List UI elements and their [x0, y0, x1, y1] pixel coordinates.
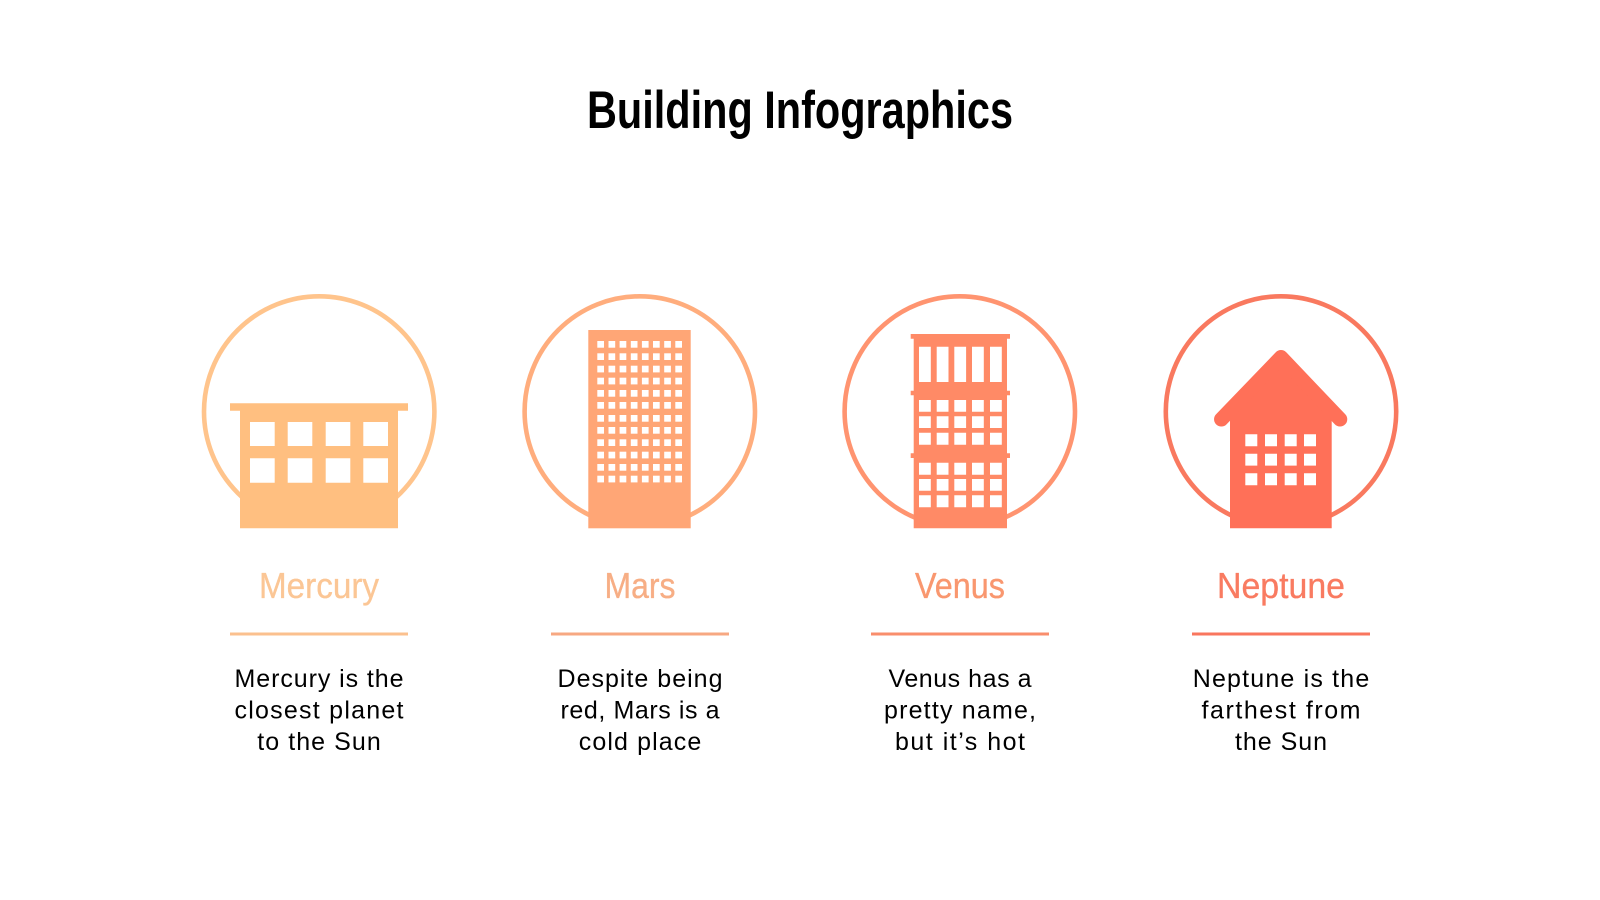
- panel: Neptune: [1166, 296, 1396, 756]
- panel: Mars: [525, 296, 755, 756]
- icon: three-tier building in circle: [845, 296, 1075, 528]
- text block: Neptune: the Sun: [1235, 728, 1327, 756]
- heading: Venus: Venus: [915, 565, 1005, 606]
- text block: Venus: [884, 665, 1036, 756]
- text block: Mercury: [234, 665, 404, 756]
- text block: Mercury: Mercury is the: [234, 665, 404, 693]
- icon: high-rise tower in circle: [525, 296, 755, 528]
- text block: Venus: but it’s hot: [895, 728, 1025, 756]
- text block: Neptune: [1193, 665, 1369, 756]
- text block: Venus: Venus has a: [888, 665, 1032, 693]
- heading: Neptune: Neptune: [1217, 565, 1345, 606]
- panel: Mercury: [204, 296, 434, 756]
- text block: Venus: pretty name,: [884, 696, 1036, 724]
- text block: Neptune: farthest from: [1202, 696, 1360, 724]
- text block: Mars: cold place: [579, 728, 701, 756]
- divider: Venus: [871, 632, 1049, 636]
- icon: low-rise building in circle: [204, 296, 434, 528]
- divider: Neptune: [1192, 632, 1370, 636]
- text block: Mercury: closest planet: [234, 696, 404, 724]
- heading: Mercury: Mercury: [259, 565, 379, 606]
- text block: Mars: [558, 665, 722, 756]
- text block: Mars: Despite being: [558, 665, 722, 693]
- infographic canvas: [202, 90, 1398, 755]
- text block: Neptune: Neptune is the: [1193, 665, 1369, 693]
- title: Building Infographics: [587, 81, 1013, 140]
- divider: Mars: [551, 632, 729, 636]
- divider: Mercury: [230, 632, 408, 636]
- icon: house-shaped building in circle: [1166, 296, 1396, 528]
- panel: Venus: [845, 296, 1075, 756]
- text block: Mercury: to the Sun: [257, 728, 381, 756]
- text block: Mars: red, Mars is a: [560, 696, 720, 724]
- heading: Mars: Mars: [604, 565, 676, 606]
